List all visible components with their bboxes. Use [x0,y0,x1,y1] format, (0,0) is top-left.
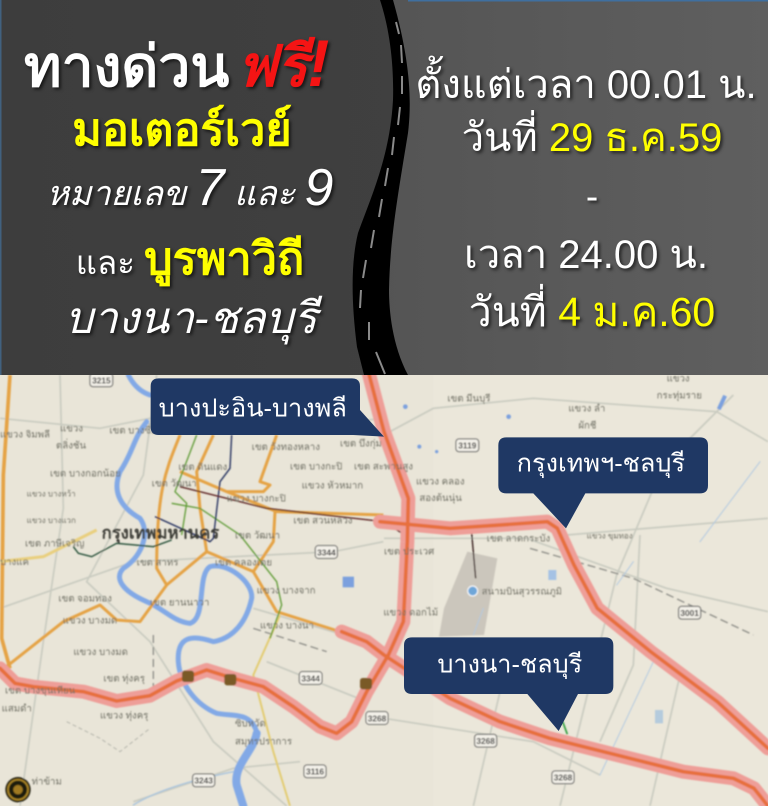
map place labels: เขต วังทองหลาง [252,442,320,453]
map place labels: เขต สะพานสูง [354,461,413,472]
map place labels: เขต บางกอกน้อย [50,469,121,480]
map place labels [0,374,702,787]
map place labels: เขต สวนหลวง [293,515,353,526]
callout: Bangkok - Chonburi: กรุงเทพฯ-ชลบุรี [517,449,685,478]
title: ทางด่วนฟรี! [24,26,329,100]
airport icon [468,586,478,596]
text: end time: เวลา 24.00 น. [464,233,708,277]
river [117,375,760,806]
map place labels: เขต คลองเตย [215,558,272,569]
map place labels: แขวง บางกะปิ [227,494,286,505]
callout: Bang Pa-In - Bang Phli: บางปะอิน-บางพลี [159,394,347,422]
map place labels: แขวง ดอกไม้ [383,607,438,619]
map place labels: เขต ภาษีเจริญ [25,538,84,550]
text: and Burapha Withi: และ บูรพาวิถี [76,233,304,284]
map: กรุงเทพมหานคร [102,523,219,543]
heading: motorway: มอเตอร์เวย์ [72,104,292,155]
map place labels: แขวง บางมด [73,647,128,658]
map: 3119 [458,441,477,451]
map: 3215 [92,376,111,386]
expressway: Chonburi motorway and ring roads [0,372,768,806]
map place labels: เขต ลาดกระบัง [487,534,550,545]
map place labels: เขต ดินแดง [178,462,228,473]
text: start time: ตั้งแต่เวลา 00.01 น. [415,63,757,107]
map [0,375,768,806]
text: Bang Na - Chonburi: บางนา-ชลบุรี [65,294,317,343]
map: 3116 [306,767,324,777]
map place labels: บางแค [0,557,29,568]
map place labels: สองต้นนุ่น [419,493,462,504]
map place labels: ซิบหวัด [235,719,266,730]
map place labels: เขต บางซื่อ [109,423,157,436]
map place labels: เขต ยานนาวา [150,598,209,609]
minor roads [0,375,768,806]
callout: Bang Pa-In - Bang Phli [151,378,384,437]
orange roads [0,375,383,672]
water patches [343,395,727,723]
map place labels: แขวง บางจาก [257,585,316,596]
map place labels: แขวง บางแวก [27,516,76,525]
map place labels: แขวง บางหว้า [27,490,76,499]
map place labels: เขต บึงกุ่ม [340,439,382,450]
map: 3243 [194,776,213,786]
highway shields [90,373,701,787]
callout: Bang Na - Chonburi: บางนา-ชลบุรี [437,650,582,679]
map place labels: เขต บางกะปิ [290,461,342,472]
map: 3268 [368,713,387,723]
map place labels: แขวง จิมพลี [0,428,50,440]
transit lines [73,435,567,734]
panel: header background [0,0,768,375]
emblem [5,777,31,802]
map: 3344 [301,673,320,683]
map place labels: แขวง ขุมทอง [587,531,633,540]
map: 3344 [317,547,336,557]
map place labels: แขวง คลอง [416,476,465,487]
map place labels: แขวง ทุ่งครุ [100,710,148,721]
map place labels: เขต มีนบุรี [447,393,490,405]
map place labels: แขวง [60,424,83,435]
map place labels: เขต สาทร [137,558,178,569]
map place labels: แขวง หัวหมาก [302,480,363,491]
map place labels: แสมดำ [2,704,32,715]
text: dash: - [586,176,598,217]
text: motorway numbers: หมายเลข 7 และ 9 [47,159,333,217]
map: 3268 [476,736,495,746]
map place labels: เขต วัฒนา [152,479,197,490]
toll markers [182,671,372,689]
map place labels: เขต วัฒนา [235,530,280,541]
map: 3001 [680,608,699,618]
map place labels: สมุทรปราการ [235,736,292,747]
map place labels: กระทุ่มราย [657,390,702,401]
map place labels: ผักชี [578,419,597,431]
map place labels: แขวง ลำ [568,404,605,415]
map: 3268 [554,773,573,783]
map place labels: เขต ทุ่งครุ [103,674,145,685]
map place labels: เขต บางขุนเทียน [5,684,76,696]
callout: Bang Na - Chonburi [404,637,613,731]
map place labels: แขวง บางมด [63,615,117,626]
map place labels: เขต จอมทอง [58,594,112,605]
text: start date: วันที่ 29 ธ.ค.59 [462,116,722,160]
map place labels: ท่าข้าม [32,776,62,787]
map place labels: สนามบินสุวรรณภูมิ [482,586,562,597]
callout: Bangkok - Chonburi [498,437,708,528]
airport [439,552,497,637]
map place labels: แขวง บางนา [260,620,314,631]
text: end date: วันที่ 4 ม.ค.60 [469,289,715,335]
map place labels: เขต ประเวศ [384,546,435,557]
map place labels: ตลิ่งชัน [56,438,86,451]
